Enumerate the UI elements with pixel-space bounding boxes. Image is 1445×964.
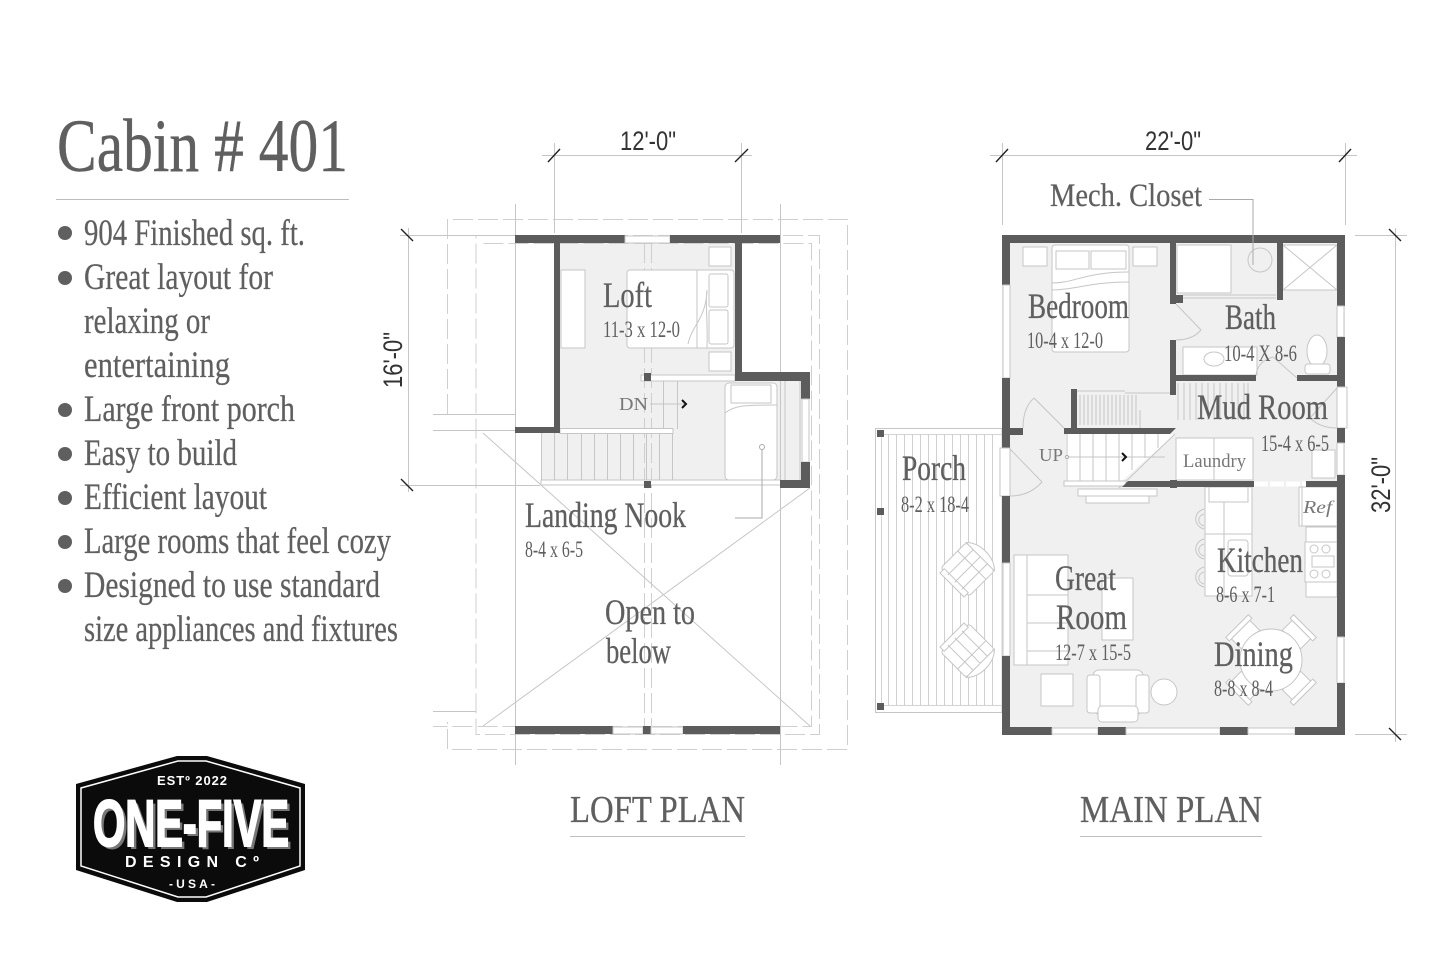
leader line [735,444,764,518]
bedroom furniture [1023,245,1157,352]
bathroom fixtures [1177,245,1337,375]
main plan [876,178,1347,735]
main room labels: UP [1039,445,1063,465]
feature list: Large rooms that feel cozy [84,521,391,562]
feature list [58,213,398,650]
main room labels: Laundry [1183,451,1246,472]
kitchen [1196,487,1337,597]
main room labels: 12-7 x 15-5 [1055,640,1131,665]
main plan caption: MAIN PLAN [1080,789,1262,831]
main depth dimension [1355,228,1407,742]
feature list: Designed to use standard [84,565,380,606]
mechanical closet leader [1209,200,1253,265]
loft room labels [525,275,695,671]
main room labels: 8-8 x 8-4 [1214,676,1273,701]
loft width dimension [542,126,752,233]
loft stairs [541,375,781,485]
main room labels: 10-4 x 12-0 [1027,328,1103,353]
loft depth dimension: 16'-0" [378,332,408,388]
porch chairs [938,537,1000,683]
loft plan [433,204,848,765]
main room labels: Kitchen [1217,540,1303,580]
main room labels: Porch [902,448,966,488]
loft room labels: 8-4 x 6-5 [525,537,583,562]
loft room labels: below [606,631,671,671]
loft room labels: Open to [605,592,695,632]
main room labels: 8-2 x 18-4 [901,492,969,517]
up arrow [1066,453,1126,461]
logo: DESIGN Cº [125,854,259,871]
dining table [1203,592,1339,728]
feature list: relaxing or [84,301,210,342]
main depth dimension: 32'-0" [1366,457,1396,513]
feature list: size appliances and fixtures [84,609,398,650]
main floor [1002,235,1345,734]
main room labels: Room [1056,597,1127,637]
feature list: entertaining [84,345,230,386]
main stairs [1064,434,1175,503]
logo: -USA- [169,877,215,891]
main room labels [901,178,1336,701]
main width dimension: 22'-0" [1145,126,1201,156]
closet and mudroom storage [1077,383,1335,480]
title: Cabin # 401 [57,105,348,188]
main room labels: Mud Room [1197,387,1328,427]
loft room labels: DN [619,394,648,414]
loft depth dimension [378,228,515,492]
main room labels: Mech. Closet [1050,178,1202,214]
feature list: Great layout for [84,257,273,298]
loft floor [541,243,801,480]
main room labels: Dining [1214,634,1293,674]
logo: ESTº 2022 [157,773,227,788]
main room labels: Bath [1225,297,1276,337]
main room labels: Bedroom [1028,286,1129,326]
main room labels: Ref [1302,497,1336,517]
loft walls [515,235,810,734]
feature list: Easy to build [84,433,237,474]
feature list: 904 Finished sq. ft. [84,213,305,254]
loft furniture [561,247,800,480]
main room labels: 15-4 x 6-5 [1261,431,1329,456]
loft overhang outlines [433,204,848,765]
great room furniture [1014,555,1177,722]
main room labels: 10-4 X 8-6 [1224,341,1297,366]
porch [876,428,1002,712]
main room labels: 8-6 x 7-1 [1216,582,1275,607]
logo: ONE-FIVE [96,789,292,863]
main width dimension [990,126,1357,225]
feature list: Large front porch [84,389,295,430]
loft room labels: 11-3 x 12-0 [603,317,680,342]
loft plan caption: LOFT PLAN [570,789,745,831]
loft room labels: Landing Nook [525,495,686,535]
stair direction arrow [650,400,686,408]
main room labels: Great [1055,558,1116,598]
logo: ONE-FIVE [93,786,289,860]
logo [76,756,305,902]
feature list: Efficient layout [84,477,268,518]
main walls [1000,235,1347,735]
loft width dimension: 12'-0" [620,126,676,156]
loft room labels: Loft [603,275,652,315]
door swings [1010,304,1337,496]
